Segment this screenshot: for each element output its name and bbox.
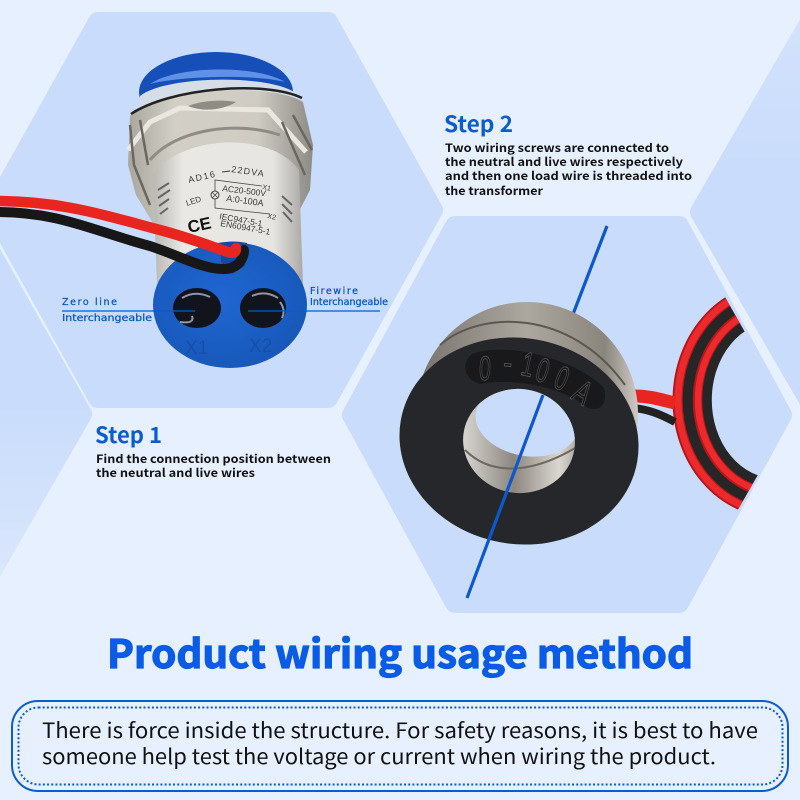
blue load wire through the ring [467,395,543,598]
printed specification text: CE [186,213,213,237]
black ring face [383,319,655,563]
X1 marking: X1 [185,338,208,359]
printed specification text [185,164,277,237]
short cable lead [634,396,675,422]
heading: step 2: Step 2 [444,107,513,139]
annotation: zero line: Interchangeable [62,313,152,324]
vent slots [158,183,292,222]
0-100A embossed label: 0 [549,358,575,398]
text block: step 2 description: the neutral and live wires respectively [445,154,683,170]
blue front bezel [139,52,294,132]
annotation: zero line: Zero line [62,297,117,308]
callout: safety note [12,701,788,791]
0-100A embossed label: 1 [518,344,538,384]
printed specification text: 22DVA [231,164,266,179]
0-100A embossed label: 0 [478,349,492,387]
panel: left side hexagon [0,225,82,600]
printed specification text: IEC947-5-1 [219,211,263,229]
silver transformer casing [416,302,638,526]
safety text [42,715,758,771]
outer rounded border [12,701,788,791]
ring hole with silver inner wall [463,388,575,494]
black and red cable [0,201,244,269]
panel: step 1 hexagon [0,22,433,398]
annotation: firewire [248,286,388,311]
printed specification text: X2 [267,213,277,222]
heading: step 1: Step 1 [95,418,162,450]
casing groove [440,322,625,385]
0-100A embossed label: A [566,372,600,413]
0-100A embossed label [478,343,600,413]
title: Product wiring usage method [107,624,693,680]
safety text: someone help test the voltage or current when wiring the product. [42,741,716,771]
embossed label area [465,350,605,409]
printed specification text: LED [185,194,203,208]
0-100A embossed label: 0 [532,350,554,390]
safety text: There is force inside the structure. For safety reasons, it is best to have [42,715,758,745]
annotation: firewire: Firewire [310,286,358,297]
panel: step 2 hexagon [352,226,782,603]
X2 marking: X2 [249,336,272,357]
text block: step 2 description [445,140,692,199]
screw hole X1 [173,288,221,328]
blue terminal face [153,242,307,368]
panel: right side hexagon [700,22,800,402]
printed specification text: AD16 [187,169,217,185]
text block: step 2 description: the transformer [445,183,544,199]
looped red and black cable [672,297,758,510]
printed specification text: A:0-100A [226,193,264,208]
cable slot [221,242,247,274]
printed specification text: X1 [262,184,272,193]
annotation: zero line [62,297,195,324]
white cylinder body [153,142,303,285]
printed specification text: AC20-500V [222,183,267,198]
text block: step 2 description: and then one load wire is threaded into [445,168,692,184]
printed specification text: EN60947-5-1 [220,218,271,237]
text block: step 1 description [96,451,331,481]
device: panel indicator meter [0,52,313,368]
text block: step 1 description: the neutral and live wires [96,465,255,481]
blue load wire behind the ring [570,226,607,322]
dotted inner border [18,708,782,784]
0-100A embossed label: - [501,343,514,382]
screw hole X2 [240,288,286,328]
text block: step 1 description: Find the connection position between [96,451,331,467]
text block: step 2 description: Two wiring screws are connected to [445,140,669,156]
current transformer with cable [383,226,775,598]
annotation: firewire: Interchangeable [310,297,388,308]
threaded nut [128,88,313,225]
